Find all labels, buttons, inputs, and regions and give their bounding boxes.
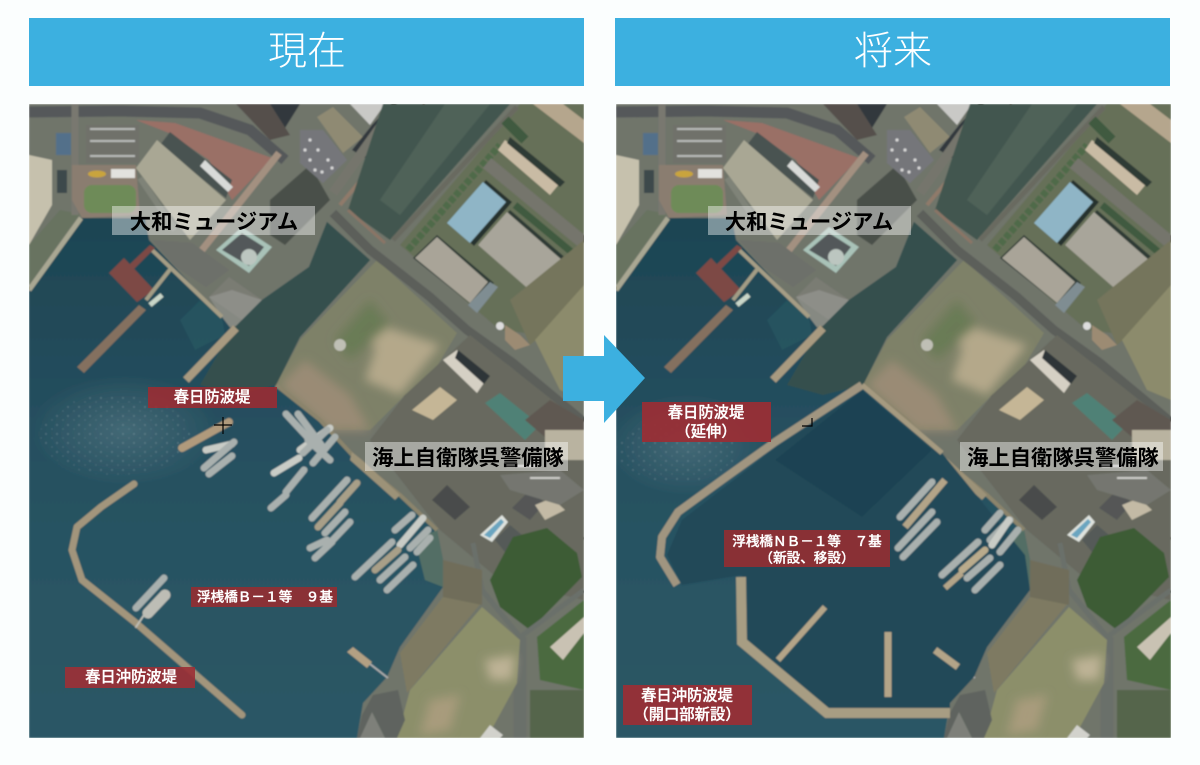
label: JMSDF Kure: 海上自衛隊呉警備隊	[967, 446, 1159, 470]
label: Kasuga breakwater	[148, 387, 277, 408]
label: Kasuga breakwater extension	[642, 402, 771, 442]
sea glitter	[620, 427, 744, 481]
new floating piers	[778, 480, 962, 697]
Kasuga offshore breakwater	[72, 484, 242, 715]
Kasuga breakwater	[182, 422, 229, 448]
label: Yamato Museum: 大和ミュージアム	[130, 210, 298, 234]
label: Kasuga breakwater extension: （延伸）	[675, 424, 737, 440]
extended Kasuga breakwater	[660, 385, 862, 585]
relocated vessels	[898, 482, 1018, 590]
new offshore breakwater with opening	[741, 577, 950, 713]
label: offshore breakwater opening: （開口部新設）	[633, 706, 741, 724]
label: new and moved piers: 浮桟橋ＮＢ－１等 ７基	[732, 533, 882, 549]
label: Yamato Museum	[708, 206, 911, 235]
label: floating piers: 浮桟橋Ｂ－１等 ９基	[197, 588, 333, 604]
label: Kasuga breakwater: 春日防波堤	[174, 388, 250, 406]
sea glitter	[40, 390, 191, 475]
label: floating piers	[191, 587, 337, 607]
bracket mark	[802, 418, 812, 426]
label: Kasuga offshore breakwater: 春日沖防波堤	[85, 668, 177, 686]
heading bar: current: 現在	[268, 30, 346, 74]
panel: future aerial map	[607, 104, 1171, 738]
dredged basin	[854, 392, 875, 402]
cross mark	[214, 417, 232, 434]
moored vessels	[136, 414, 430, 627]
panel: current aerial map	[29, 104, 584, 738]
label: Yamato Museum	[112, 206, 315, 235]
label: offshore breakwater opening: 春日沖防波堤	[641, 686, 733, 704]
label: new and moved piers	[724, 530, 890, 567]
label: Kasuga breakwater extension: 春日防波堤	[668, 404, 744, 422]
label: new and moved piers: （新設、移設）	[759, 550, 855, 566]
arrow: current to future	[563, 335, 645, 423]
heading bar: future	[615, 18, 1170, 86]
reclaimed harbour water	[668, 440, 1030, 708]
heading bar: current	[29, 18, 584, 86]
heading bar: future: 将来	[854, 30, 932, 74]
label: Yamato Museum: 大和ミュージアム	[725, 210, 893, 234]
label: Kasuga offshore breakwater	[65, 667, 195, 688]
label: JMSDF Kure: 海上自衛隊呉警備隊	[372, 446, 564, 470]
label: offshore breakwater opening	[623, 685, 752, 725]
